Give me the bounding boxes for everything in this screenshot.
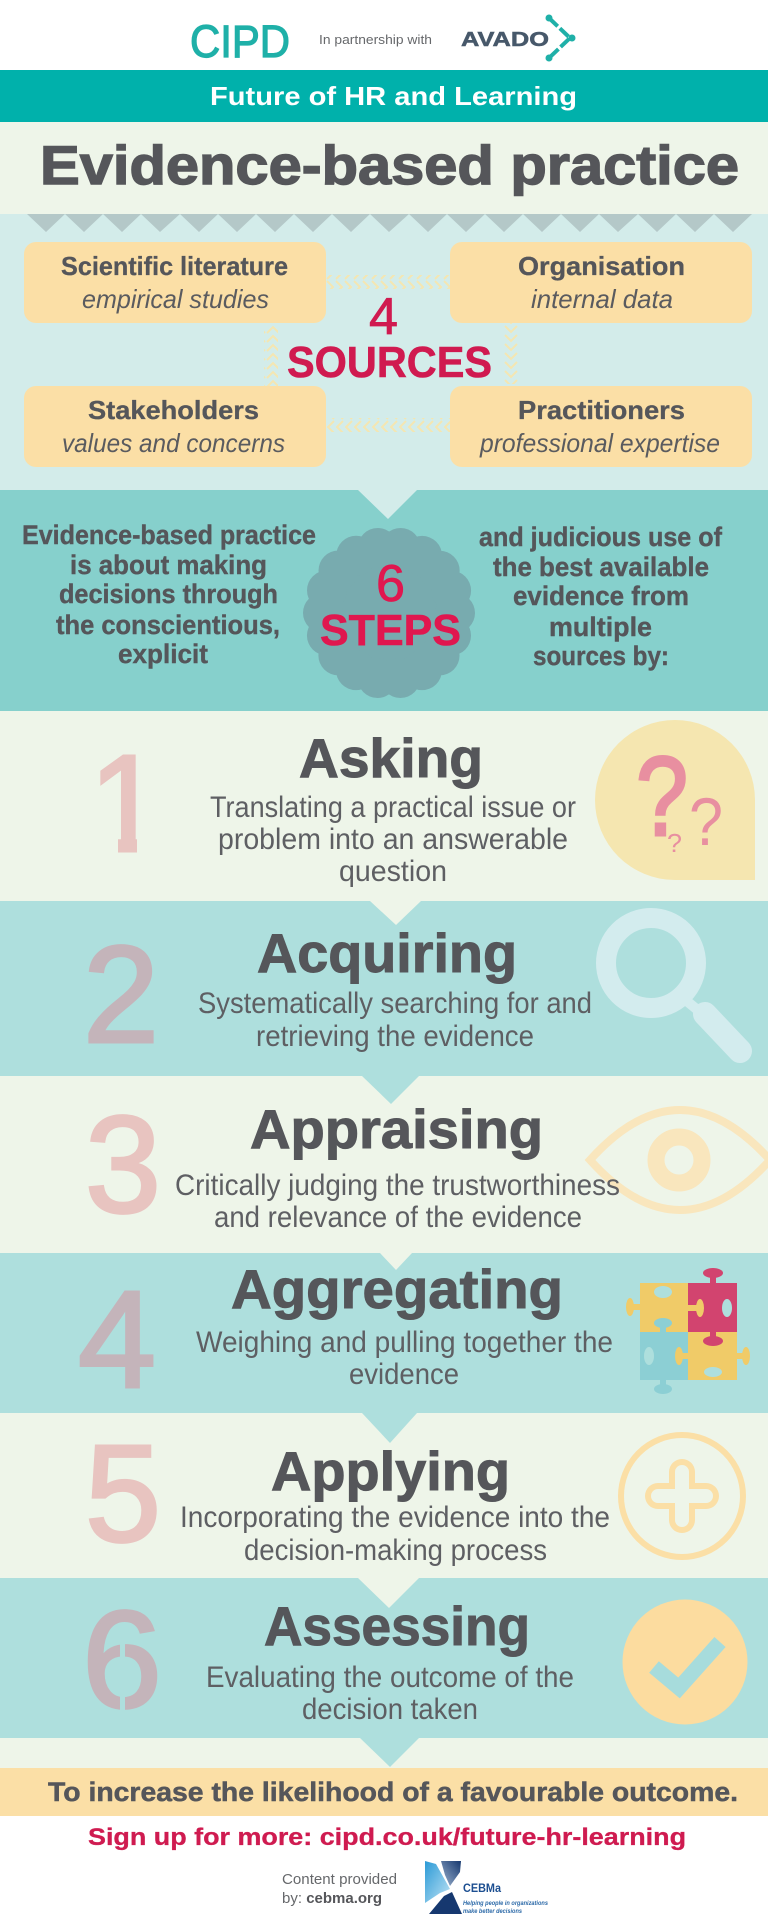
heading: Asking: Asking [299, 727, 483, 789]
text: intro left [22, 520, 316, 669]
heading: Acquiring: Acquiring [257, 922, 517, 984]
description: assessing: Evaluating the outcome of the [206, 1661, 574, 1694]
text: intro right [479, 522, 723, 671]
banner: Future of HR and Learning: Future of HR and Learning [210, 81, 577, 111]
logo: CEBMa: make better decisions [463, 1908, 522, 1915]
text: intro right: sources by: [533, 641, 669, 671]
card: scientific literature [24, 242, 326, 323]
logo: CEBMa: CEBMa [463, 1881, 501, 1895]
step 1: asking [0, 711, 768, 901]
logo: AVADO: AVADO [461, 29, 549, 51]
number 1: 1 [89, 727, 163, 881]
content credit: Content provided [282, 1871, 397, 1888]
icon: question marks [595, 720, 755, 880]
text: intro left: explicit [118, 639, 208, 669]
step 5: applying [0, 1413, 768, 1578]
badge: 6 steps [320, 547, 461, 679]
content credit: by: cebma.org [282, 1890, 382, 1907]
description: acquiring [198, 987, 592, 1053]
text: intro right: the best available [493, 552, 709, 582]
text: intro right: evidence from [513, 581, 689, 611]
icon: check mark [622, 1600, 748, 1724]
description: asking: question [339, 855, 447, 888]
panel: final arrow [0, 1738, 768, 1768]
icon: question marks: ? [689, 784, 723, 860]
heading: Appraising: Appraising [250, 1098, 543, 1160]
arrow: right chevrons [504, 323, 518, 384]
card: stakeholders: values and concerns [62, 428, 285, 458]
text: intro right: and judicious use of [479, 522, 723, 552]
card: stakeholders: Stakeholders [88, 395, 259, 425]
heading: 4 sources: SOURCES [287, 338, 492, 387]
description: asking: problem into an answerable [218, 823, 568, 856]
arrow: top chevrons [326, 275, 450, 289]
heading: Aggregating: Aggregating [231, 1258, 563, 1320]
card: organisation: internal data [531, 284, 673, 314]
description: acquiring: Systematically searching for and [198, 987, 592, 1020]
card: organisation: Organisation [518, 251, 685, 281]
title: Evidence-based practice [0, 122, 768, 214]
logo: AVADO [461, 14, 576, 62]
number 5: 5 [85, 1417, 161, 1571]
card: scientific literature: Scientific literature [61, 251, 288, 281]
description: appraising [175, 1169, 620, 1234]
heading: Applying: Applying [271, 1440, 510, 1502]
card: organisation [450, 242, 752, 323]
step 6: assessing [0, 1578, 768, 1738]
text: intro left: Evidence-based practice [22, 520, 316, 550]
heading: Assessing: Assessing [264, 1595, 530, 1657]
icon: question marks: ? [636, 734, 688, 859]
arrow: left chevrons [264, 325, 278, 386]
sign up link: Sign up for more: cipd.co.uk/future-hr-learning [88, 1824, 686, 1851]
number 6: 6 [82, 1583, 162, 1737]
card: practitioners: professional expertise [479, 428, 720, 458]
description: asking: Translating a practical issue or [210, 791, 576, 824]
panel: 4 sources [0, 214, 768, 491]
description: aggregating: evidence [349, 1358, 459, 1391]
card: practitioners [450, 386, 752, 467]
description: applying: decision-making process [244, 1534, 547, 1567]
step 2: acquiring [0, 901, 768, 1076]
description: applying: Incorporating the evidence into the [180, 1501, 610, 1534]
icon: eye [590, 1110, 768, 1210]
heading: 4 sources: 4 [369, 288, 398, 346]
card: scientific literature: empirical studies [82, 284, 269, 314]
logo: CEBMa: Helping people in organizations [463, 1900, 548, 1907]
text: intro left: decisions through [59, 579, 278, 609]
card: stakeholders [24, 386, 326, 467]
heading: 4 sources [287, 288, 492, 387]
banner: Future of HR and Learning [0, 70, 768, 122]
title: Evidence-based practice: Evidence-based practice [40, 134, 739, 196]
icon: magnifier [606, 918, 740, 1051]
icon: plus in circle [621, 1435, 743, 1557]
description: appraising: and relevance of the evidence [214, 1201, 582, 1234]
badge: 6 steps: STEPS [320, 606, 461, 655]
description: applying [180, 1501, 610, 1567]
card: practitioners: Practitioners [518, 395, 685, 425]
content credit [282, 1871, 397, 1907]
number 3: 3 [85, 1088, 161, 1242]
description: aggregating: Weighing and pulling together the [196, 1326, 613, 1359]
number 4: 4 [78, 1263, 156, 1417]
logo: CEBMa [425, 1861, 548, 1915]
description: appraising: Critically judging the trustworthiness [175, 1169, 620, 1202]
outcome banner: To increase the likelihood of a favourable outcome. [48, 1777, 738, 1807]
text: intro left: is about making [70, 550, 267, 580]
text: intro right: multiple [549, 612, 652, 642]
outcome banner [0, 1768, 768, 1816]
text: intro left: the conscientious, [56, 610, 280, 640]
description: assessing: decision taken [302, 1693, 478, 1726]
description: asking [210, 791, 576, 888]
step 4: aggregating [0, 1253, 768, 1417]
icon: question marks: ? [667, 828, 682, 858]
description: assessing [206, 1661, 574, 1726]
icon: puzzle [626, 1268, 750, 1394]
panel: 6 steps intro [0, 490, 768, 711]
description: acquiring: retrieving the evidence [256, 1020, 534, 1053]
number 2: 2 [83, 918, 159, 1072]
partnership text: In partnership with [319, 32, 432, 47]
description: aggregating [196, 1326, 613, 1391]
arrow: bottom chevrons [326, 418, 450, 432]
badge: 6 steps: 6 [376, 555, 405, 613]
logo: CIPD: CIPD [190, 16, 290, 67]
step 3: appraising [0, 1076, 768, 1253]
header logos [190, 14, 576, 67]
